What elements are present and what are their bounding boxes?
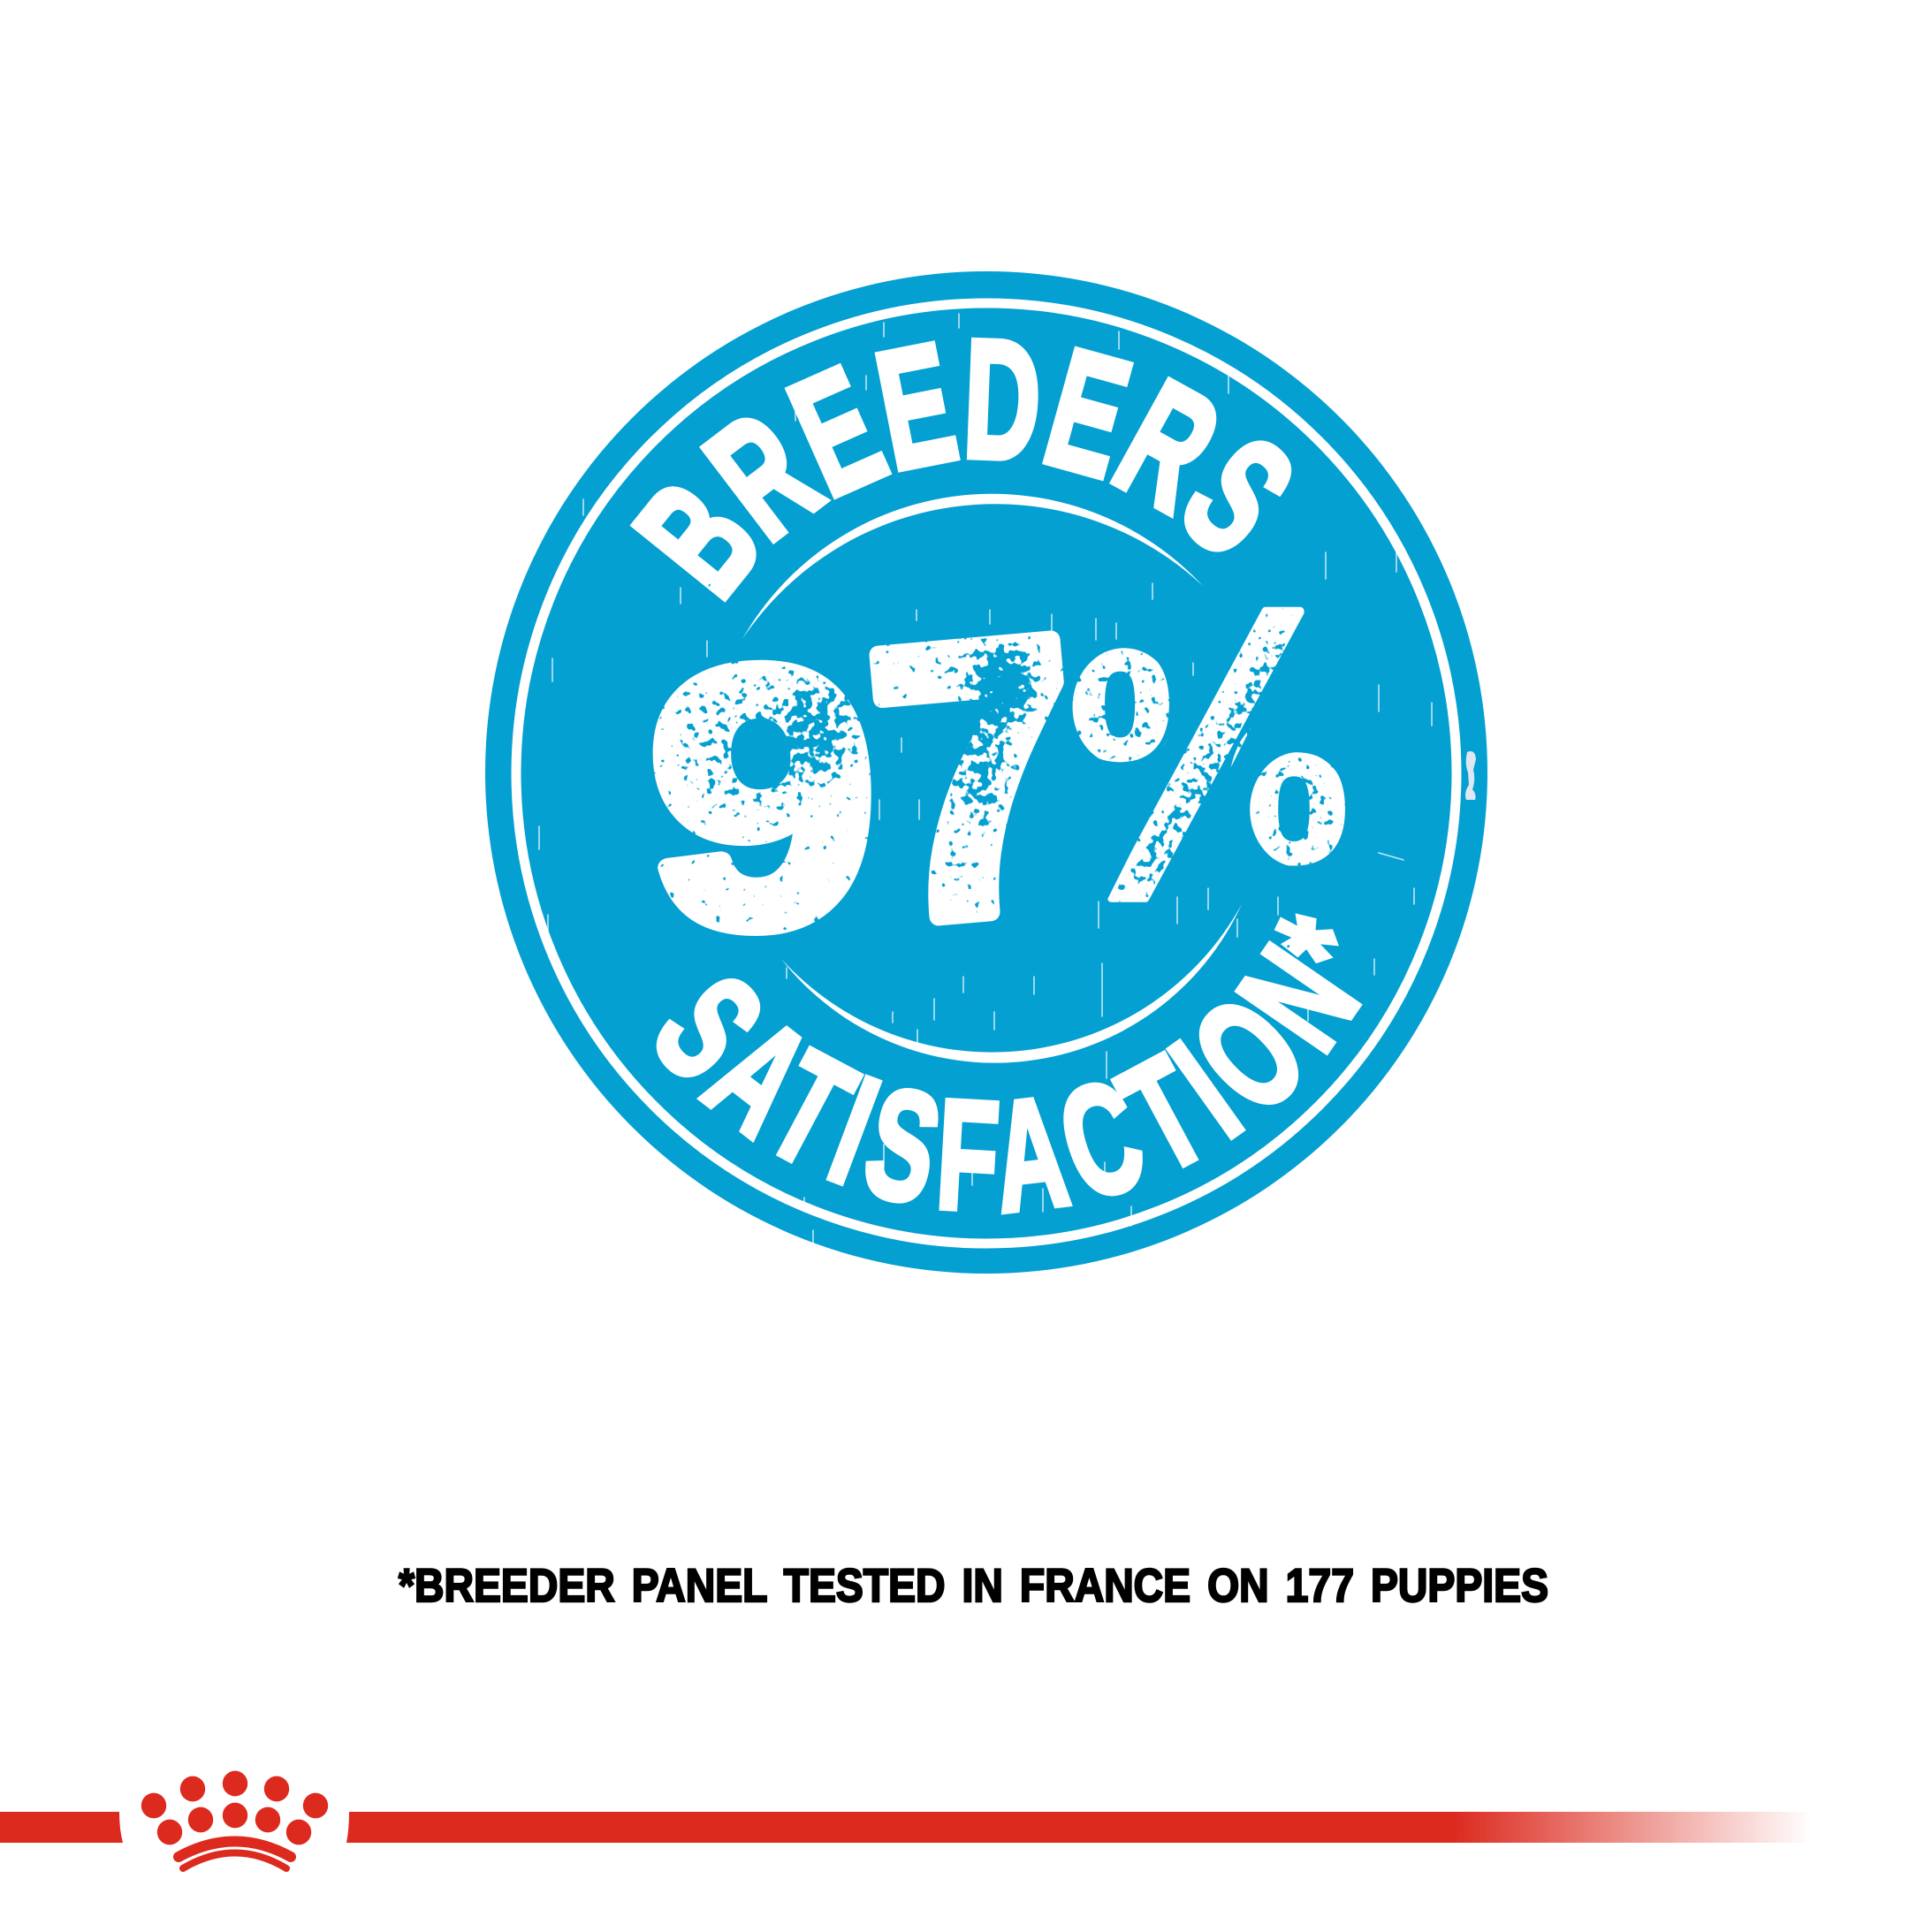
big number: 97% — [652, 606, 1345, 936]
big number: 97%: % — [1053, 522, 1358, 986]
big number: 97%: % — [1067, 598, 1304, 878]
badge: 97% breeders satisfaction — [485, 271, 1487, 1274]
big number: 97%: 7 — [856, 555, 1098, 1003]
distress scratches — [539, 314, 1458, 1250]
heading: BREEDERS: BREEDERS — [629, 338, 1292, 603]
big number: 97%: % — [1101, 638, 1350, 914]
icon: royal crown logo — [141, 1771, 328, 1868]
footer bar: right segment with fade — [346, 1812, 1812, 1843]
worn speckle texture on the number — [672, 636, 1340, 894]
edge wear mark — [1465, 751, 1476, 800]
lower crescent — [781, 904, 1242, 1063]
footnote: *BREEDER PANEL TESTED IN FRANCE ON 177 PUPPIES — [399, 1560, 1548, 1612]
badge inner ring — [516, 303, 1457, 1244]
upper crescent — [742, 494, 1203, 639]
footer bar: left segment — [0, 1812, 123, 1843]
badge disc — [485, 271, 1487, 1274]
big number: 97%: 9 — [650, 596, 875, 1000]
heading: SATISFACTION*: SATISFACTION* — [656, 913, 1363, 1214]
